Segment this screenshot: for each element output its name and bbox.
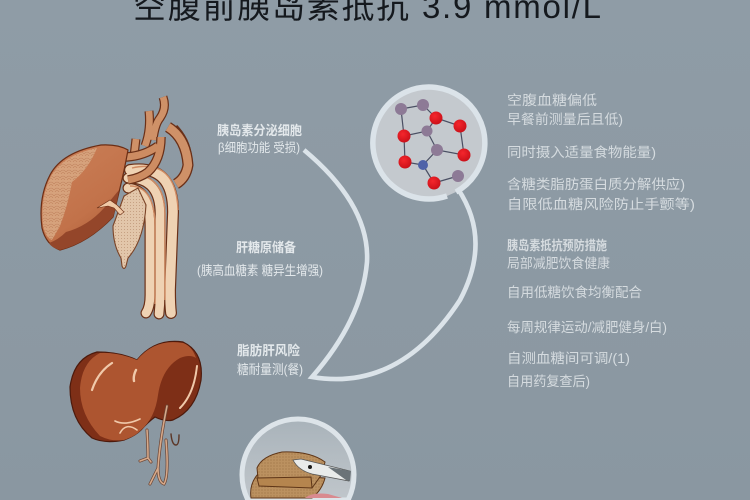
label: middle organ: 肝糖原储备 (236, 240, 296, 255)
text block: advice notes: 胰岛素抵抗预防措施 (507, 238, 607, 253)
grey and violet atoms (395, 99, 464, 182)
liver lobe (41, 145, 128, 250)
label: liver (237, 343, 303, 377)
text block: advice notes (507, 238, 667, 389)
icon: pancreas and ducts (41, 97, 189, 314)
nitrogen atom (418, 160, 428, 170)
label: top organ: β细胞功能 受损) (218, 141, 300, 155)
gall sac (113, 188, 146, 268)
text block: molecule notes: 含糖类脂肪蛋白质分解供应) (507, 176, 685, 192)
molecule bonds (401, 105, 464, 183)
icon: bread and knife (240, 416, 356, 500)
text block: advice notes: 自用药复查后) (507, 373, 590, 389)
liver ducts (140, 406, 179, 484)
label: middle organ (197, 240, 323, 278)
label: top organ (217, 123, 302, 155)
text block: advice notes: 局部减肥饮食健康 (507, 255, 610, 271)
lobe texture (42, 148, 97, 240)
label: middle organ: (胰高血糖素 糖异生增强) (197, 263, 323, 278)
oxygen atoms (398, 112, 470, 190)
text block: advice notes: 每周规律运动/减肥健身/白) (507, 320, 667, 335)
neck ducts (126, 137, 161, 180)
connector: speech-bubble curve (304, 150, 476, 379)
text block: molecule notes: 自限低血糖风险防止手颤等) (507, 196, 695, 212)
icon: molecule bubble (373, 87, 485, 199)
icon: liver (70, 341, 201, 484)
long strands (128, 169, 173, 314)
text block: molecule notes (507, 92, 695, 212)
text block: molecule notes: 早餐前测量后且低) (507, 111, 623, 127)
text block: molecule notes: 同时摄入适量食物能量) (507, 144, 656, 160)
text block: advice notes: 自用低糖饮食均衡配合 (507, 284, 642, 300)
label: liver: 脂肪肝风险 (237, 343, 300, 358)
text block: molecule notes: 空腹血糖偏低 (507, 92, 598, 108)
label: top organ: 胰岛素分泌细胞 (217, 123, 302, 138)
upper ducts (134, 97, 189, 184)
text block: advice notes: 自测血糖间可调/(1) (507, 351, 630, 366)
label: liver: 糖耐量测(餐) (237, 362, 303, 377)
